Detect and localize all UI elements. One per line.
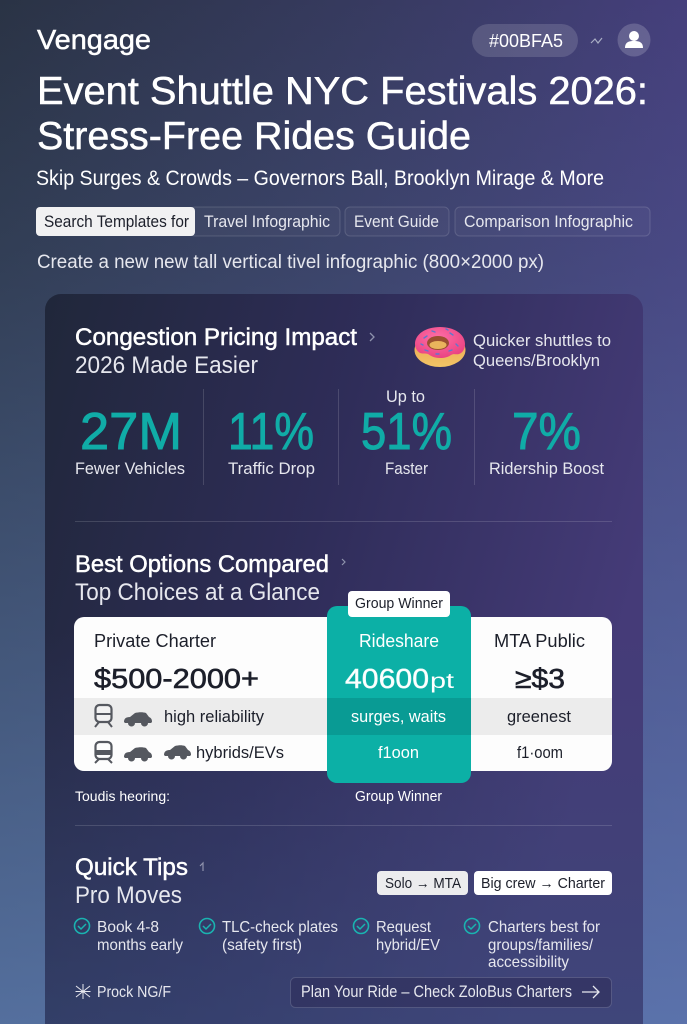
prompt line: Create a new new tall vertical tivel infographic (800×2000 px) bbox=[37, 252, 544, 273]
icon: donut bbox=[414, 327, 466, 367]
heading: best options bbox=[75, 551, 329, 606]
donut caption: Queens/Brooklyn bbox=[473, 351, 600, 370]
stat: traffic drop: Traffic Drop bbox=[228, 459, 315, 478]
tag: solo to mta: Solo → MTA bbox=[385, 875, 461, 892]
tip: book early bbox=[74, 918, 183, 954]
tip: request hybrid: Request bbox=[376, 919, 432, 936]
column: rideshare highlighted: Rideshare bbox=[359, 631, 439, 651]
tag: comparison infographic bbox=[455, 207, 650, 236]
stat: ridership boost bbox=[489, 403, 604, 478]
heading: congestion pricing bbox=[75, 324, 357, 379]
tag: big crew to charter bbox=[474, 871, 612, 895]
column: rideshare highlighted: pt bbox=[430, 670, 454, 693]
title bbox=[37, 70, 648, 158]
icon: user avatar bbox=[618, 24, 650, 56]
column: mta public: MTA Public bbox=[494, 631, 585, 651]
tag: travel infographic: Travel Infographic bbox=[204, 212, 330, 231]
heading: best options: Top Choices at a Glance bbox=[75, 579, 320, 606]
tip: charters best: accessibility bbox=[488, 954, 569, 971]
column: mta public bbox=[494, 631, 585, 762]
column: mta public: ≥$3 bbox=[515, 663, 565, 694]
stat: faster: Up to bbox=[386, 387, 425, 406]
column: rideshare highlighted: 40600 bbox=[345, 663, 429, 694]
call to action button: Plan Your Ride – Check ZoloBus Charters bbox=[301, 983, 572, 1001]
tip: book early: Book 4-8 bbox=[97, 919, 159, 936]
tag: event guide: Event Guide bbox=[354, 212, 439, 231]
tip: charters best bbox=[464, 918, 601, 971]
stat: fewer vehicles: Fewer Vehicles bbox=[75, 459, 185, 478]
tag: big crew to charter: Big crew → Charter bbox=[481, 875, 605, 892]
column: private charter: hybrids/EVs bbox=[196, 743, 284, 762]
tip: request hybrid: hybrid/EV bbox=[376, 937, 440, 954]
icon: heading chevron bbox=[342, 559, 345, 565]
tip: charters best: Charters best for bbox=[488, 919, 601, 936]
stat: traffic drop bbox=[228, 403, 315, 478]
search tag row bbox=[36, 207, 650, 236]
heading: best options: Best Options Compared bbox=[75, 551, 329, 578]
column: private charter bbox=[94, 631, 284, 763]
call to action button bbox=[290, 978, 612, 1008]
icon: small chevron squiggle bbox=[591, 38, 602, 43]
table body bbox=[74, 617, 612, 771]
heading: congestion pricing: Congestion Pricing Impact bbox=[75, 324, 357, 351]
heading: congestion pricing: 2026 Made Easier bbox=[75, 352, 258, 379]
tip: tlc check: TLC-check plates bbox=[222, 919, 338, 936]
heading: quick tips: Pro Moves bbox=[75, 882, 182, 909]
heading: quick tips bbox=[75, 854, 188, 909]
column: rideshare highlighted: surges, waits bbox=[351, 707, 446, 726]
title: Stress-Free Rides Guide bbox=[37, 115, 471, 158]
donut caption: Quicker shuttles to bbox=[473, 331, 611, 350]
tip: charters best: groups/families/ bbox=[488, 937, 594, 954]
tip: request hybrid bbox=[354, 918, 440, 954]
badge: group winner bbox=[348, 591, 450, 617]
subtitle: Skip Surges & Crowds – Governors Ball, Brooklyn Mirage & More bbox=[36, 167, 604, 190]
tip: book early: months early bbox=[97, 937, 183, 954]
header colour pill bbox=[472, 24, 578, 57]
icon: car bbox=[124, 712, 152, 727]
header colour pill: #00BFA5 bbox=[489, 31, 563, 51]
stat: traffic drop: 11% bbox=[228, 403, 314, 461]
stat: faster: Faster bbox=[385, 459, 428, 478]
icon: heading chevron bbox=[370, 333, 374, 341]
comparison table bbox=[74, 591, 612, 783]
tag: search templates: Search Templates for bbox=[44, 212, 189, 231]
stat: faster bbox=[361, 387, 452, 478]
icon: small glyph bbox=[200, 863, 203, 871]
column: mta public: greenest bbox=[507, 707, 571, 726]
heading: quick tips: Quick Tips bbox=[75, 854, 188, 881]
stat: faster: 51% bbox=[361, 403, 452, 461]
column: rideshare highlighted bbox=[327, 606, 471, 783]
panel: main card bbox=[45, 294, 643, 1024]
icon: car bbox=[164, 745, 191, 760]
stat: ridership boost: Ridership Boost bbox=[489, 459, 604, 478]
tip: tlc check bbox=[200, 918, 338, 954]
badge: group winner: Group Winner bbox=[355, 595, 443, 612]
footer note: Prock NG/F bbox=[97, 984, 171, 1001]
tag: event guide bbox=[345, 207, 449, 236]
column: private charter: $500-2000+ bbox=[94, 663, 259, 694]
icon: car bbox=[124, 747, 152, 762]
tag: travel infographic bbox=[190, 207, 340, 236]
stat: ridership boost: 7% bbox=[512, 403, 581, 461]
tag: solo to mta bbox=[377, 871, 468, 895]
column: mta public: f1·oom bbox=[517, 743, 563, 762]
caption: group winner: Group Winner bbox=[355, 788, 442, 805]
header logo: Vengage bbox=[37, 24, 151, 55]
tag: comparison infographic: Comparison Infographic bbox=[464, 212, 633, 231]
icon: bus bbox=[95, 742, 112, 763]
tip: tlc check: (safety first) bbox=[222, 937, 302, 954]
donut caption bbox=[473, 331, 611, 370]
column: private charter: Private Charter bbox=[94, 631, 216, 651]
tag: search templates bbox=[36, 207, 195, 236]
title: Event Shuttle NYC Festivals 2026: bbox=[37, 70, 648, 113]
column: rideshare highlighted: f1oon bbox=[378, 743, 419, 762]
stat: fewer vehicles: 27M bbox=[80, 403, 182, 461]
icon: bus bbox=[95, 705, 112, 727]
table footnote: Toudis heoring: bbox=[75, 788, 170, 804]
column: private charter: high reliability bbox=[164, 707, 264, 726]
